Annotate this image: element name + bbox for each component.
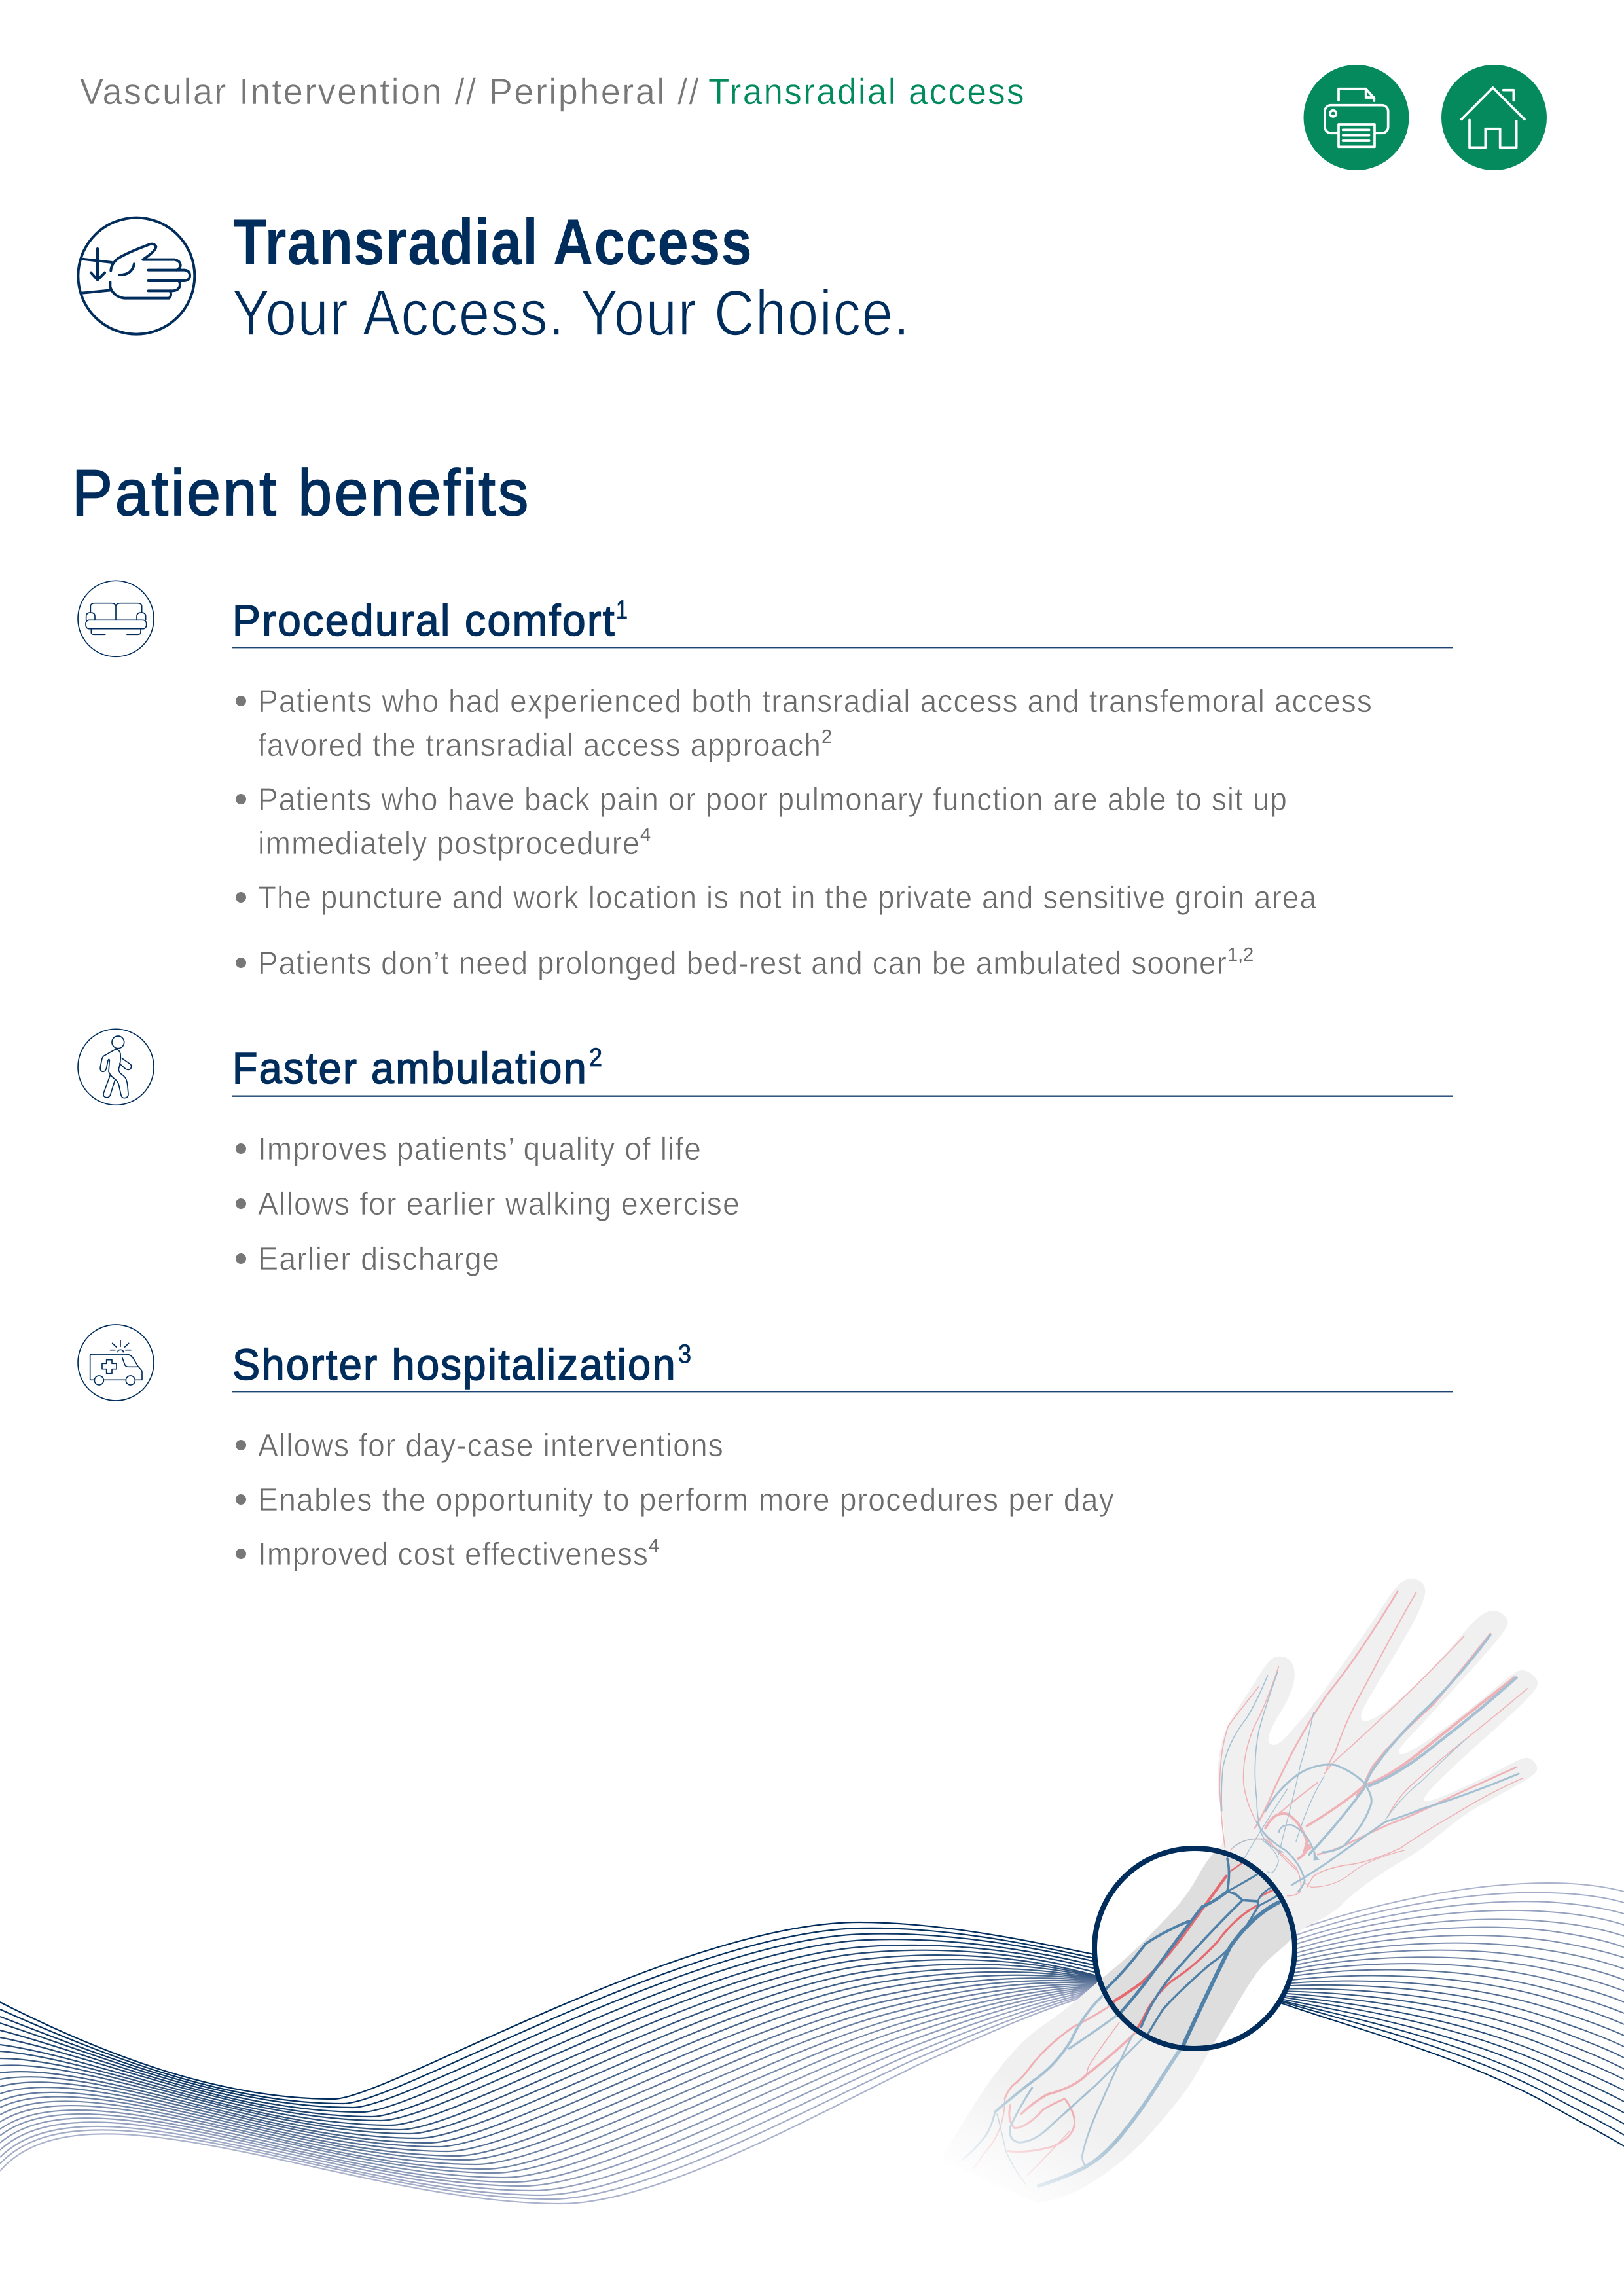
illustration: hand and forearm with blood vessels (941, 1579, 1538, 2204)
bullet list: procedural comfort: The puncture and work location is not in the private and sensitive groin area (258, 880, 1317, 916)
bullet list: procedural comfort: favored the transradial access approach (258, 728, 821, 763)
icon: sofa (78, 581, 154, 656)
bullet list: faster ambulation: Allows for earlier walking exercise (258, 1187, 740, 1222)
section: shorter hospitalization (232, 1340, 1453, 1572)
bullet list: procedural comfort: 2 (821, 726, 832, 747)
forearm vessels below the lens (962, 1996, 1187, 2186)
bullet list: faster ambulation: Earlier discharge (258, 1242, 500, 1277)
title: Transradial Access (233, 206, 753, 278)
decorative wave lines: left (0, 1922, 1106, 2204)
heading: patient benefits: Patient benefits (72, 456, 531, 529)
heading: shorter hospitalization: Shorter hospitalization (232, 1340, 677, 1390)
bullet list: procedural comfort: Patients who had experienced both transradial access and transfemoral access (258, 684, 1373, 719)
icon: hand with downward arrow (78, 218, 194, 334)
bullet list: procedural comfort: Patients who have back pain or poor pulmonary function are able to sit up (258, 782, 1288, 817)
icon: walking person (78, 1029, 154, 1105)
heading: procedural comfort: Procedural comfort (232, 596, 616, 645)
bullet list: procedural comfort: immediately postprocedure (258, 826, 640, 861)
bullet list: shorter hospitalization: Allows for day-case interventions (258, 1428, 724, 1463)
bullet list: faster ambulation: Improves patients’ quality of life (258, 1132, 702, 1167)
icon: ambulance (78, 1325, 154, 1401)
heading: procedural comfort: 1 (616, 596, 628, 624)
heading: shorter hospitalization: 3 (678, 1340, 691, 1369)
heading: faster ambulation: 2 (589, 1043, 602, 1072)
title (232, 206, 911, 349)
icon: home button (1441, 65, 1547, 170)
bullet list: shorter hospitalization: 4 (649, 1535, 659, 1556)
bullet list: procedural comfort: 4 (640, 825, 651, 846)
magnifier lens on wrist (1092, 1846, 1297, 2051)
breadcrumb: Transradial access (708, 71, 1026, 112)
decorative wave lines: right (1276, 1883, 1624, 2146)
bullet list: procedural comfort: Patients don’t need prolonged bed-rest and can be ambulated sooner (258, 946, 1227, 981)
title: Your Access. Your Choice. (232, 277, 911, 349)
breadcrumb (80, 71, 1026, 112)
bullet list: faster ambulation (236, 1132, 740, 1277)
bullet list: procedural comfort: 1,2 (1227, 944, 1254, 965)
breadcrumb: Vascular Intervention // Peripheral // (80, 71, 700, 112)
icon: print button (1304, 65, 1409, 170)
heading: faster ambulation: Faster ambulation (232, 1044, 588, 1093)
bullet list: shorter hospitalization: Enables the opportunity to perform more procedures per day (258, 1482, 1115, 1518)
bullet list: shorter hospitalization (236, 1428, 1115, 1572)
section: procedural comfort (232, 596, 1453, 981)
section: faster ambulation (232, 1043, 1453, 1277)
bullet list: procedural comfort (236, 684, 1373, 981)
bullet list: shorter hospitalization: Improved cost effectiveness (258, 1537, 649, 1572)
